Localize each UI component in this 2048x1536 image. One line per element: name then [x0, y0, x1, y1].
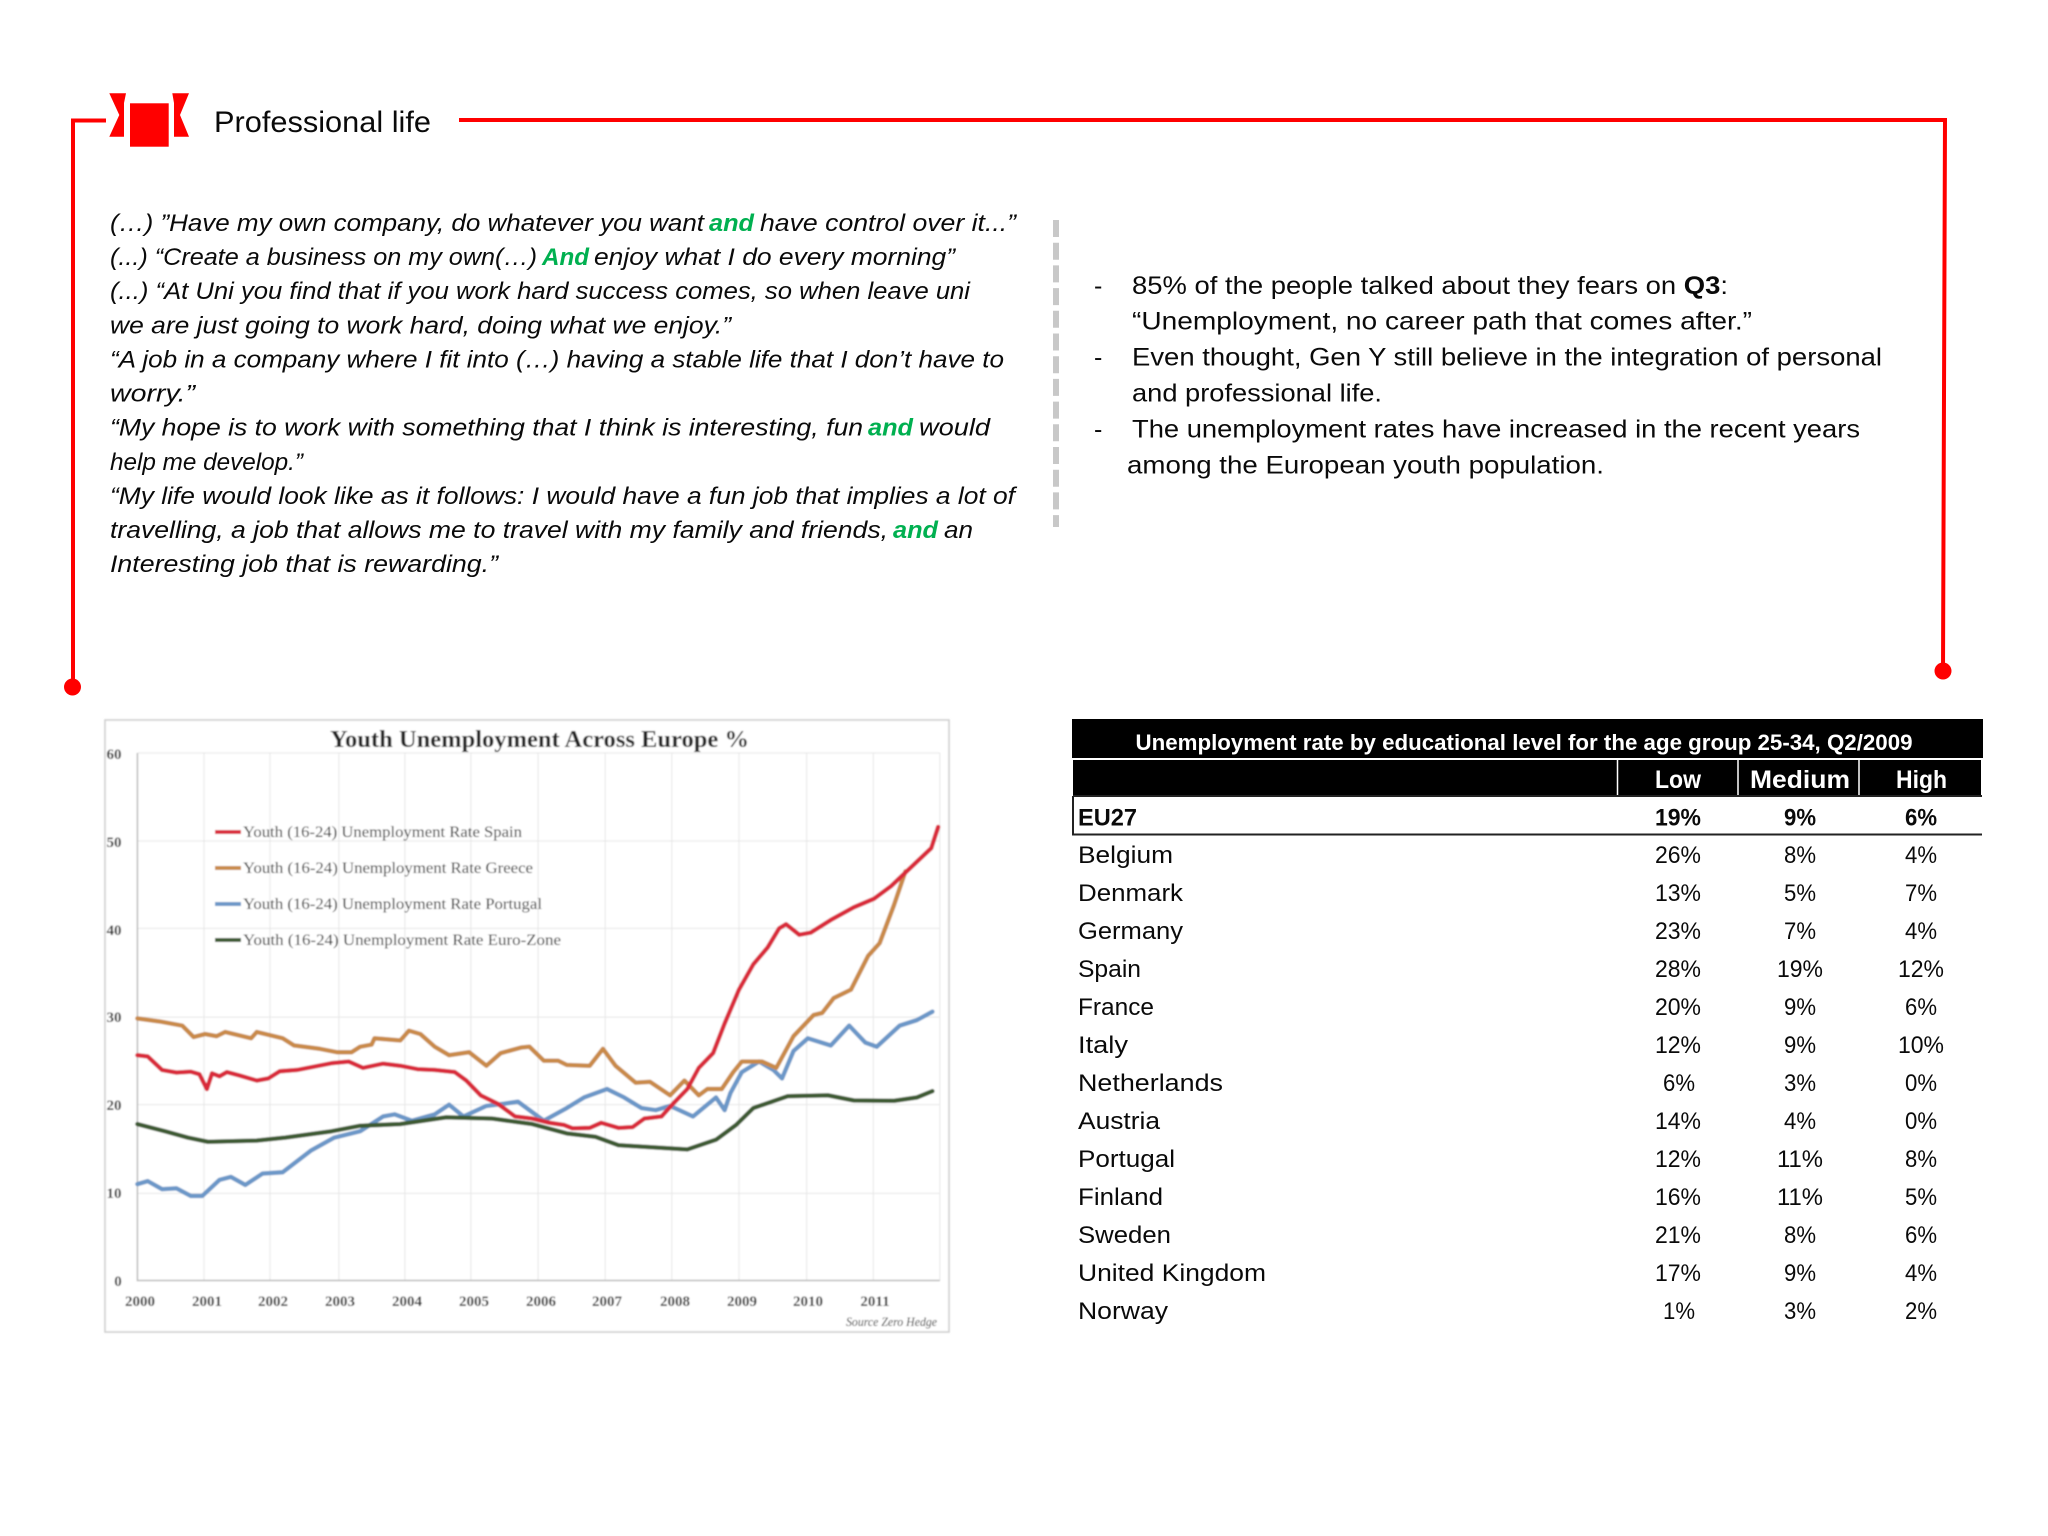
y axis labels: 20	[106, 1098, 122, 1114]
quotes text block: “A job in a company where I fit into (…) having a stable life that I don’t have to	[110, 346, 1004, 374]
x axis labels: 2007	[592, 1294, 622, 1310]
quotes text block: help me develop.”	[110, 449, 304, 476]
country rows: 12%	[1898, 956, 1944, 983]
quotes text block: (...) “Create a business on my own(…)	[110, 244, 537, 271]
red frame connector with end dots	[64, 120, 1952, 696]
country rows: Netherlands	[1078, 1070, 1223, 1097]
key findings bullets: -	[1094, 344, 1102, 372]
country rows: France	[1078, 994, 1154, 1021]
x axis labels: 2006	[526, 1294, 556, 1310]
quotes text block: (...) “At Uni you find that if you work hard success comes, so when leave uni	[110, 278, 971, 305]
country rows: 6%	[1663, 1070, 1695, 1097]
series: Spain	[137, 827, 938, 1128]
quotes text block: worry.”	[110, 381, 196, 408]
country rows: 9%	[1784, 1032, 1816, 1059]
key findings bullets: among the European youth population.	[1127, 452, 1604, 480]
country rows: Belgium	[1078, 842, 1173, 869]
country rows: 8%	[1784, 1222, 1816, 1249]
country rows: 3%	[1784, 1070, 1816, 1097]
country rows: 3%	[1784, 1298, 1816, 1325]
country rows: 2%	[1905, 1298, 1937, 1325]
country rows: Italy	[1078, 1032, 1128, 1059]
country rows: 9%	[1784, 994, 1816, 1021]
chart legend: Youth (16-24) Unemployment Rate Euro-Zone	[243, 932, 561, 949]
country rows: 23%	[1655, 918, 1701, 945]
quotes text block: we are just going to work hard, doing what we enjoy.”	[110, 312, 732, 339]
table header: Low	[1655, 766, 1701, 794]
key findings bullets: The unemployment rates have increased in the recent years	[1132, 416, 1860, 444]
country rows: 28%	[1655, 956, 1701, 983]
series: Greece	[137, 871, 905, 1095]
y axis labels: 50	[106, 835, 122, 851]
country rows: 12%	[1655, 1032, 1701, 1059]
country rows: 9%	[1784, 1260, 1816, 1287]
x axis labels: 2011	[860, 1294, 890, 1310]
country rows: 4%	[1784, 1108, 1816, 1135]
series: Euro-Zone	[137, 1091, 932, 1149]
chart legend: Youth (16-24) Unemployment Rate Spain	[243, 824, 522, 841]
y axis labels: 60	[106, 747, 122, 763]
key findings bullets: and professional life.	[1132, 380, 1382, 408]
quotes text block: travelling, a job that allows me to travel with my family and friends,	[110, 517, 888, 544]
country rows: 26%	[1655, 842, 1701, 869]
x axis labels: 2003	[325, 1294, 355, 1310]
country rows: Finland	[1078, 1184, 1163, 1211]
country rows: 0%	[1905, 1108, 1937, 1135]
highlighted row: EU27: 9%	[1784, 804, 1816, 832]
chart legend: Youth (16-24) Unemployment Rate Portugal	[243, 896, 543, 913]
quotes text block: Interesting job that is rewarding.”	[110, 551, 499, 578]
table: unemployment rate by educational level	[1072, 719, 1983, 1325]
quotes text block: And	[541, 244, 590, 271]
country rows: Portugal	[1078, 1146, 1175, 1173]
country rows: Austria	[1078, 1108, 1161, 1135]
table header: High	[1896, 766, 1947, 794]
country rows: 20%	[1655, 994, 1701, 1021]
country rows: 6%	[1905, 1222, 1937, 1249]
x axis labels: 2005	[459, 1294, 489, 1310]
y axis labels: 0	[114, 1274, 122, 1290]
table header: Medium	[1750, 766, 1850, 794]
country rows: 5%	[1784, 880, 1816, 907]
x axis labels: 2002	[258, 1294, 288, 1310]
quotes text block: and	[868, 415, 914, 442]
country rows: 17%	[1655, 1260, 1701, 1287]
quotes text block: have control over it...”	[760, 210, 1017, 237]
y axis labels: 40	[106, 923, 122, 939]
country rows: 6%	[1905, 994, 1937, 1021]
x axis labels: 2000	[125, 1294, 155, 1310]
highlighted row: EU27	[1072, 796, 1982, 835]
x axis labels: 2008	[660, 1294, 690, 1310]
country rows: Denmark	[1078, 880, 1184, 907]
quotes text block: “My life would look like as it follows: I would have a fun job that implies a lot of	[110, 483, 1018, 510]
icon: red ribbon square	[109, 93, 189, 147]
country rows: 10%	[1898, 1032, 1944, 1059]
country rows: 11%	[1777, 1184, 1823, 1211]
highlighted row: EU27: 6%	[1905, 804, 1937, 832]
country rows: 14%	[1655, 1108, 1701, 1135]
chart title: Youth Unemployment Across Europe %	[330, 727, 749, 753]
key findings bullets: Even thought, Gen Y still believe in the integration of personal	[1132, 344, 1882, 372]
quotes text block: (…) ”Have my own company, do whatever you want	[110, 210, 705, 237]
country rows: 1%	[1663, 1298, 1695, 1325]
key findings bullets: -	[1094, 416, 1102, 444]
country rows: 4%	[1905, 842, 1937, 869]
dashed divider	[1053, 220, 1059, 527]
country rows: 7%	[1905, 880, 1937, 907]
x axis labels: 2009	[727, 1294, 757, 1310]
quotes text block: and	[893, 517, 939, 544]
x axis labels: 2001	[192, 1294, 222, 1310]
country rows: 8%	[1905, 1146, 1937, 1173]
x axis labels: 2004	[392, 1294, 422, 1310]
quotes text block: would	[919, 415, 991, 442]
country rows: 0%	[1905, 1070, 1937, 1097]
quotes text block: an	[944, 517, 973, 544]
country rows	[1078, 842, 1944, 1325]
highlighted row: EU27: 19%	[1655, 804, 1701, 832]
country rows: 4%	[1905, 1260, 1937, 1287]
table header	[1072, 719, 1983, 796]
country rows: United Kingdom	[1078, 1260, 1266, 1287]
country rows: Germany	[1078, 918, 1183, 945]
country rows: 19%	[1777, 956, 1823, 983]
table header: Unemployment rate by educational level for the age group 25-34, Q2/2009	[1136, 730, 1912, 755]
country rows: 7%	[1784, 918, 1816, 945]
country rows: 4%	[1905, 918, 1937, 945]
series: Portugal	[137, 1012, 932, 1196]
key findings bullets: “Unemployment, no career path that comes after.”	[1132, 308, 1752, 336]
country rows: 21%	[1655, 1222, 1701, 1249]
chart source: Source Zero Hedge	[846, 1314, 937, 1329]
x axis labels: 2010	[793, 1294, 823, 1310]
quotes text block: “My hope is to work with something that I think is interesting, fun	[110, 415, 863, 442]
key findings bullets: -	[1094, 272, 1102, 300]
quotes text block: enjoy what I do every morning”	[594, 244, 956, 271]
quotes text block	[110, 210, 1018, 578]
country rows: 8%	[1784, 842, 1816, 869]
title: Professional life	[214, 106, 431, 139]
chart legend	[215, 824, 561, 949]
country rows: Sweden	[1078, 1222, 1171, 1249]
country rows: 5%	[1905, 1184, 1937, 1211]
country rows: 12%	[1655, 1146, 1701, 1173]
country rows: 13%	[1655, 880, 1701, 907]
country rows: 11%	[1777, 1146, 1823, 1173]
chart legend: Youth (16-24) Unemployment Rate Greece	[243, 860, 533, 877]
quotes text block: and	[709, 210, 755, 237]
key findings bullets	[1094, 272, 1882, 480]
highlighted row: EU27: EU27	[1078, 804, 1137, 832]
y axis labels: 30	[106, 1010, 122, 1026]
line chart: youth unemployment across Europe	[105, 720, 949, 1332]
country rows: Spain	[1078, 956, 1141, 983]
key findings bullets: 85% of the people talked about they fears on Q3:	[1132, 272, 1728, 300]
y axis labels: 10	[106, 1186, 122, 1202]
country rows: 16%	[1655, 1184, 1701, 1211]
country rows: Norway	[1078, 1298, 1168, 1325]
y axis labels	[106, 747, 122, 1290]
x axis labels	[125, 1294, 890, 1310]
